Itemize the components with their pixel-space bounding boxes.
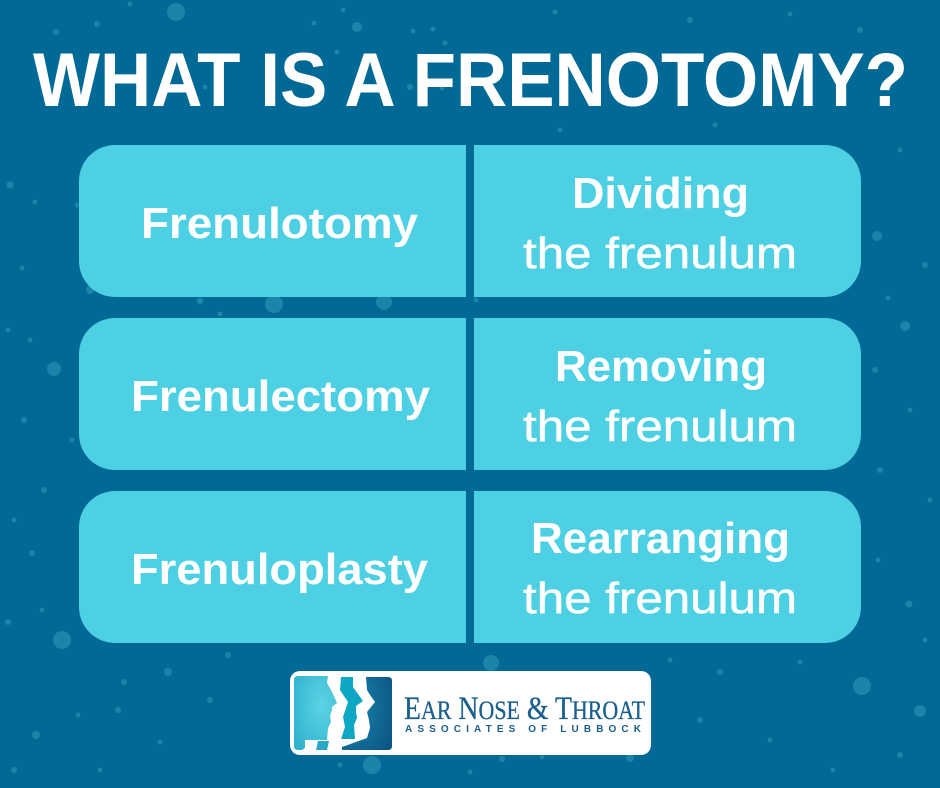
row 1 definition cell bbox=[474, 145, 861, 297]
row 3: Frenuloplasty bbox=[79, 491, 861, 643]
row 3 definition cell bbox=[474, 491, 861, 643]
row 2 term: Frenulectomy bbox=[131, 372, 431, 421]
row 2 definition: Removing bbox=[555, 342, 767, 391]
row 2: Frenulectomy bbox=[79, 318, 861, 470]
row 3 definition bbox=[523, 514, 797, 623]
row 3 term: Frenuloplasty bbox=[131, 545, 429, 594]
logo background bbox=[290, 671, 651, 755]
row 1: Frenulotomy bbox=[79, 145, 861, 297]
row 1 definition: the frenulum bbox=[523, 229, 797, 278]
logo bbox=[290, 671, 651, 755]
row 1 term: Frenulotomy bbox=[141, 199, 419, 248]
logo tagline: ASSOCIATES OF LUBBOCK bbox=[405, 724, 642, 735]
logo wordmark: EAR NOSE & THROAT bbox=[404, 691, 645, 727]
row 1 definition: Dividing bbox=[572, 169, 749, 218]
row 1 term cell bbox=[79, 145, 466, 297]
row 2 definition cell bbox=[474, 318, 861, 470]
icon: three face profiles bbox=[294, 676, 392, 750]
row 3 definition: the frenulum bbox=[523, 574, 797, 623]
row 1 definition bbox=[523, 169, 797, 278]
row 2 term cell bbox=[79, 318, 466, 470]
row 3 term cell bbox=[79, 491, 466, 643]
row 2 definition bbox=[523, 342, 797, 451]
row 2 definition: the frenulum bbox=[523, 402, 797, 451]
row 3 definition: Rearranging bbox=[531, 514, 790, 563]
